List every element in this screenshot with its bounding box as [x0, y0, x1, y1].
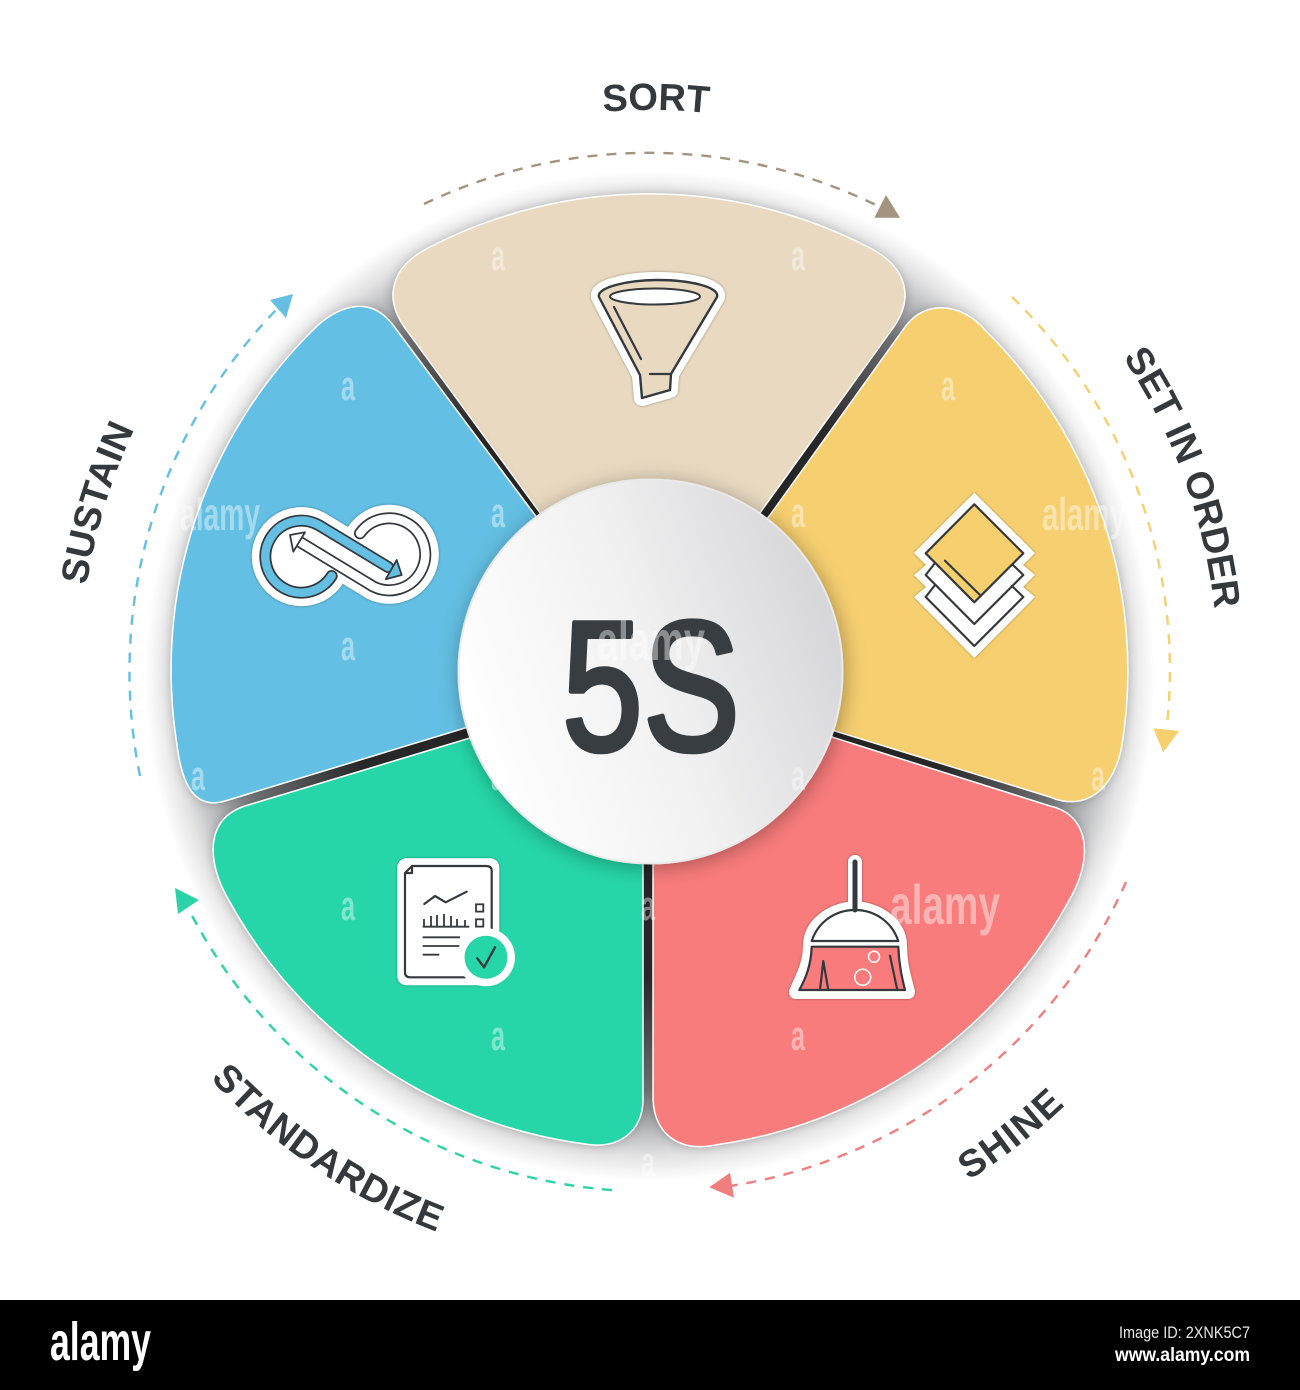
watermarks: alamy	[180, 488, 260, 540]
watermarks: a	[191, 752, 205, 799]
watermarks: a	[1091, 752, 1105, 799]
arrow: sort	[424, 153, 900, 218]
panel: sort wedge	[393, 194, 905, 672]
watermarks: a	[791, 1012, 805, 1059]
watermarks: a	[491, 752, 505, 799]
panel: standardize wedge	[213, 672, 650, 1145]
watermarks: a	[641, 882, 655, 929]
arrow: set in order	[1012, 297, 1179, 752]
watermarks: a	[791, 489, 805, 536]
watermarks: a	[341, 622, 355, 669]
watermarks: alamy	[597, 609, 705, 672]
shadow disc	[145, 171, 1155, 1181]
footer bar	[0, 1300, 1300, 1390]
watermarks: a	[491, 232, 505, 279]
heading: sort: SORT	[604, 83, 710, 112]
heading: shine: SHINE	[959, 1088, 1064, 1177]
watermarks: a	[341, 882, 355, 929]
watermarks: a	[491, 489, 505, 536]
watermarks: a	[641, 1138, 655, 1185]
arrow: standardize	[175, 888, 612, 1190]
watermarks: alamy	[1042, 488, 1126, 540]
watermarks: a	[791, 752, 805, 799]
watermarks	[180, 232, 1126, 1185]
icon: layers	[914, 493, 1035, 658]
watermarks: a	[341, 362, 355, 409]
footer url: www.alamy.com	[1114, 1345, 1250, 1366]
watermarks: a	[791, 232, 805, 279]
heading: standardize: STANDARDIZE	[214, 1065, 444, 1232]
icon: funnel	[599, 280, 717, 398]
panel: sustain wedge	[171, 306, 650, 803]
panel: set in order wedge	[650, 308, 1128, 802]
heading: set in order: SET IN ORDER	[1126, 348, 1240, 608]
icon: infinity arrows	[260, 516, 432, 596]
icon: report with check	[397, 858, 515, 986]
arrow: sustain	[129, 294, 293, 776]
icon: broom	[796, 862, 908, 992]
footer image id: Image ID: 2XNK5C7	[1119, 1323, 1250, 1342]
center hub	[458, 480, 842, 864]
panel: shine wedge	[650, 672, 1084, 1147]
watermarks: a	[491, 1012, 505, 1059]
arrow: shine	[709, 882, 1126, 1198]
watermarks: alamy	[890, 873, 1000, 936]
footer logo: alamy	[50, 1312, 151, 1372]
title: 5S: 5S	[562, 584, 740, 790]
heading: sustain: SUSTAIN	[62, 420, 134, 583]
watermarks: a	[941, 362, 955, 409]
